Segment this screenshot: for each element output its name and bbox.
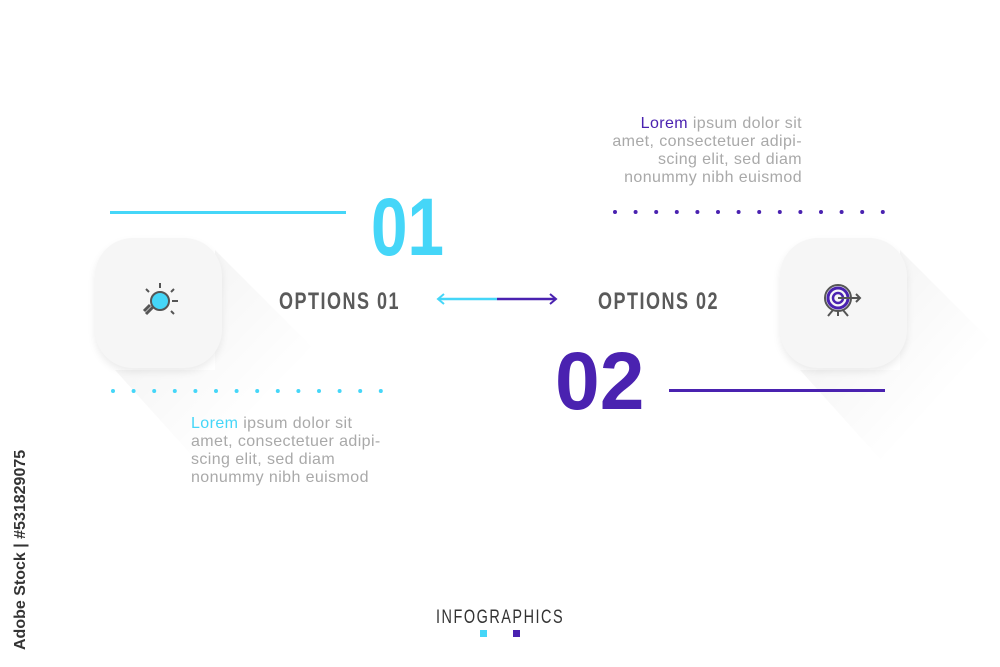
text 2: nonummy nibh euismod xyxy=(624,169,802,186)
text 1 xyxy=(191,415,381,486)
line 1 xyxy=(110,211,346,214)
side watermark text: Adobe Stock | #531829075 xyxy=(12,450,29,650)
text 1: amet, consectetuer adipi- xyxy=(191,433,381,450)
dots 1 xyxy=(111,389,383,393)
box 2 with icon xyxy=(780,238,907,368)
text 2 xyxy=(612,115,802,186)
text 1: scing elit, sed diam xyxy=(191,451,335,468)
OPTIONS 02: OPTIONS 02 xyxy=(598,288,719,315)
line 2 xyxy=(669,389,885,392)
number 02: 02 xyxy=(555,336,644,427)
icon: target xyxy=(824,284,862,317)
text 2: scing elit, sed diam xyxy=(658,151,802,168)
footer squares xyxy=(480,630,520,637)
text 2: Lorem ipsum dolor sit xyxy=(641,115,802,132)
OPTIONS 01: OPTIONS 01 xyxy=(279,288,400,315)
text 1: Lorem ipsum dolor sit xyxy=(191,415,352,432)
number 01: 01 xyxy=(371,182,444,273)
arrow xyxy=(436,293,558,305)
text 2: amet, consectetuer adipi- xyxy=(612,133,802,150)
footer title: INFOGRAPHICS xyxy=(436,607,564,628)
box 1 with icon xyxy=(95,238,222,368)
icon: lightbulb xyxy=(143,283,178,315)
text 1: nonummy nibh euismod xyxy=(191,469,369,486)
dots 2 xyxy=(613,210,885,214)
